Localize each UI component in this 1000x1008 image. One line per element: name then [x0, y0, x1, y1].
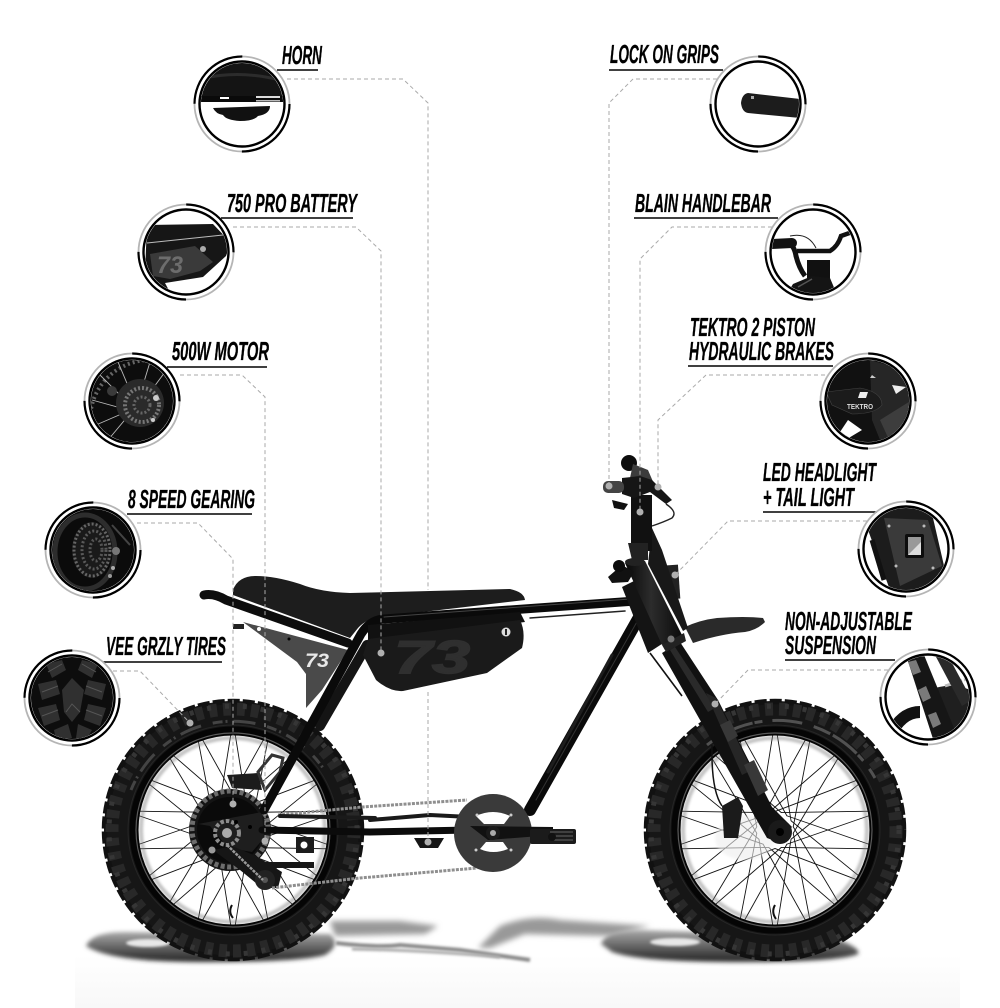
leader line: horn (upper part, behind bike)	[287, 79, 428, 590]
callout: led headlight: + TAIL LIGHT	[763, 482, 855, 512]
front fender	[685, 617, 765, 643]
callout: suspension	[785, 612, 977, 746]
rear wheel	[104, 702, 362, 958]
heading: lock on grips: LOCK ON GRIPS	[610, 39, 719, 69]
callout: vee grzly tires	[24, 631, 226, 746]
leader lines and anchor dots	[113, 79, 888, 846]
chain	[272, 800, 477, 888]
seat	[233, 576, 525, 638]
chainring and crank	[454, 794, 576, 872]
ground shading	[75, 955, 960, 1008]
icon: tire tread photo	[30, 655, 114, 741]
icon: handlebar photo	[772, 231, 850, 293]
callout: tektro brakes	[688, 312, 916, 448]
bike shadow	[86, 918, 858, 962]
rear plate with 73 logo: 73	[305, 651, 329, 672]
icon: horn photo	[200, 62, 284, 121]
callout: 500w motor	[83, 342, 269, 450]
heading: led headlight: LED HEADLIGHT	[763, 457, 877, 487]
front wheel	[646, 702, 904, 958]
heading: tektro brakes: TEKTRO 2 PISTON	[690, 312, 816, 342]
callout: blain handlebar	[634, 188, 860, 300]
battery with 73 logo: 73	[394, 631, 471, 683]
heading: blain handlebar: BLAIN HANDLEBAR	[635, 188, 771, 218]
icon: fork photo	[894, 656, 969, 738]
battery with 73 logo	[363, 612, 525, 691]
icon: brake lever photo: TEKTRO	[847, 404, 873, 411]
frame tubes	[204, 595, 642, 832]
callout: 8 speed gearing	[46, 484, 255, 598]
callout: led headlight	[763, 457, 954, 596]
pedal	[530, 829, 576, 844]
icon: brake lever photo	[827, 360, 909, 442]
callout: tektro brakes: HYDRAULIC BRAKES	[689, 336, 834, 366]
icon: headlight photo	[868, 508, 944, 590]
icon: grip photo	[741, 93, 800, 118]
icon: battery photo: 73	[157, 252, 184, 279]
callout: lock on grips	[609, 39, 806, 152]
icon: motor photo	[91, 360, 173, 442]
front disc brake	[712, 745, 775, 860]
rear hub motor	[189, 755, 314, 890]
handlebars and grips	[603, 455, 674, 560]
headlight housing	[648, 528, 688, 631]
callout: suspension: SUSPENSION	[785, 630, 877, 660]
heading: horn: HORN	[282, 40, 323, 70]
icon: battery photo	[146, 224, 227, 289]
callout: horn	[194, 40, 323, 152]
heading: 8 speed gearing: 8 SPEED GEARING	[128, 484, 255, 514]
rear plate with 73 logo	[233, 622, 348, 708]
head tube and front fork	[608, 558, 792, 844]
heading: vee grzly tires: VEE GRZLY TIRES	[106, 631, 226, 661]
icon: cassette photo	[50, 508, 136, 592]
callout: 750 pro battery	[138, 188, 358, 300]
headlight panel behind	[667, 565, 680, 599]
heading: 750 pro battery: 750 PRO BATTERY	[227, 188, 358, 218]
kickstand mount	[414, 838, 444, 848]
heading: 500w motor: 500W MOTOR	[172, 336, 269, 366]
